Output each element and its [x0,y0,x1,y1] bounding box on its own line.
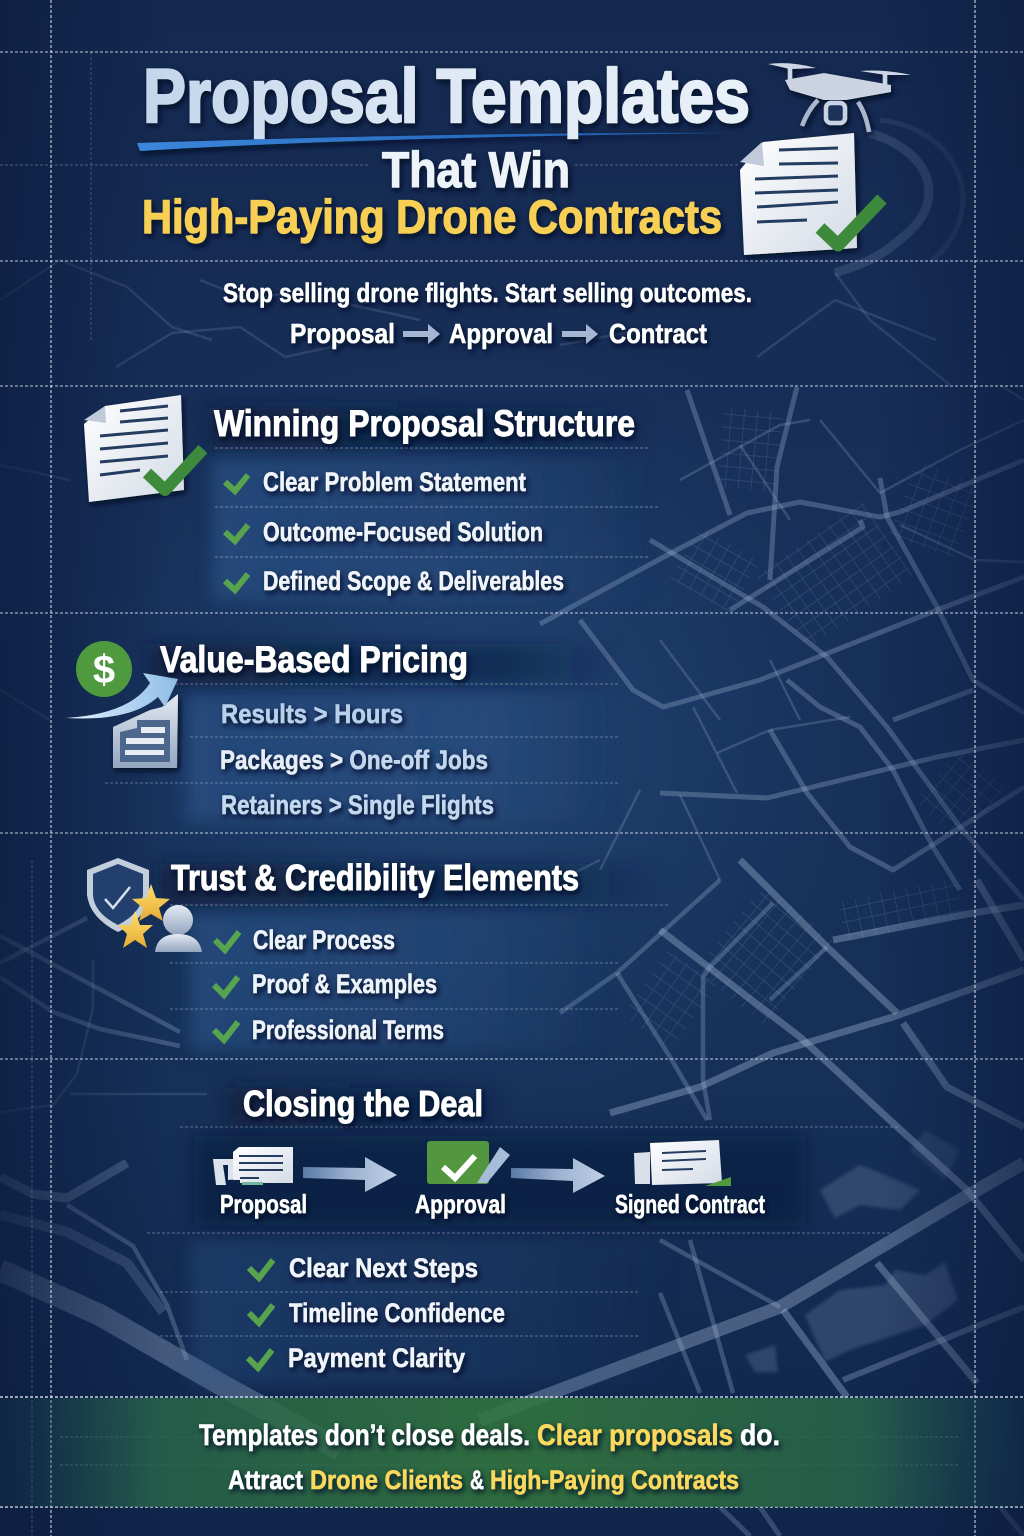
icon: pricing chart with dollar [66,641,178,768]
checklist [225,467,564,596]
heading: Closing the Deal [243,1083,483,1124]
title underline swoosh [137,133,732,151]
icon: approval [427,1141,510,1184]
step labels: Signed Contract [615,1189,765,1219]
map street grid texture [622,408,1005,1050]
step labels: Approval [415,1189,506,1219]
comparison list: Results > Hours [221,699,403,729]
footer callout: Attract [228,1465,303,1495]
checklist: Timeline Confidence [289,1298,505,1328]
comparison list [220,699,494,820]
panel: value-based pricing [66,639,494,820]
flow: proposal approval contract: Approval [449,318,553,349]
checklist: Clear Problem Statement [263,467,526,497]
process flow [213,1140,765,1219]
heading: Winning Proposal Structure [214,403,635,444]
flow: proposal approval contract [290,318,707,349]
icon: proposal [213,1147,293,1185]
checklist: Defined Scope & Deliverables [263,566,564,596]
heading: Trust & Credibility Elements [171,857,579,898]
footer green band [0,1398,1024,1507]
flow: proposal approval contract: Proposal [290,318,395,349]
footer callout [199,1419,780,1495]
checklist [248,1253,505,1373]
heading: Value-Based Pricing [160,639,468,680]
icon: signed contract [634,1140,731,1186]
icon: document with check [740,133,882,255]
icon: drone [768,63,911,132]
checklist: Clear Process [253,925,395,955]
comparison list: Retainers > Single Flights [221,790,494,820]
arrow [303,1157,397,1192]
checklist: Outcome-Focused Solution [263,517,543,547]
title [137,54,750,243]
footer callout: Drone Clients [310,1465,463,1495]
checklist: Professional Terms [252,1015,444,1045]
footer callout: Clear proposals [537,1419,733,1452]
tagline [223,278,752,349]
comparison list: Packages > One-off Jobs [220,745,488,775]
section backdrops [150,408,805,1385]
arrow [511,1158,605,1193]
checklist: Clear Next Steps [289,1253,478,1283]
tagline: Stop selling drone flights. Start selling outcomes. [223,278,752,308]
footer callout: & [470,1465,484,1495]
title line 2: That Win [382,142,570,198]
icon: document with check small [84,395,203,502]
flow: proposal approval contract: Contract [609,318,707,349]
footer callout: do. [740,1419,780,1452]
checklist [214,925,444,1045]
checklist: Proof & Examples [252,969,437,999]
footer callout: Templates don’t close deals. [199,1419,530,1452]
checklist: Payment Clarity [288,1343,465,1373]
panel: trust and credibility [87,857,579,1045]
title line 3: High-Paying Drone Contracts [142,190,722,243]
panel: closing the deal [213,1083,765,1373]
step labels: Proposal [220,1189,307,1219]
icon: shield stars person [87,858,202,952]
step labels [220,1189,765,1219]
map terrain patches [745,1130,960,1372]
panel: winning proposal structure [84,395,635,596]
title line 1: Proposal Templates [143,54,750,139]
footer callout: High-Paying Contracts [490,1465,739,1495]
icon: pricing chart with dollar: $ [93,648,115,692]
